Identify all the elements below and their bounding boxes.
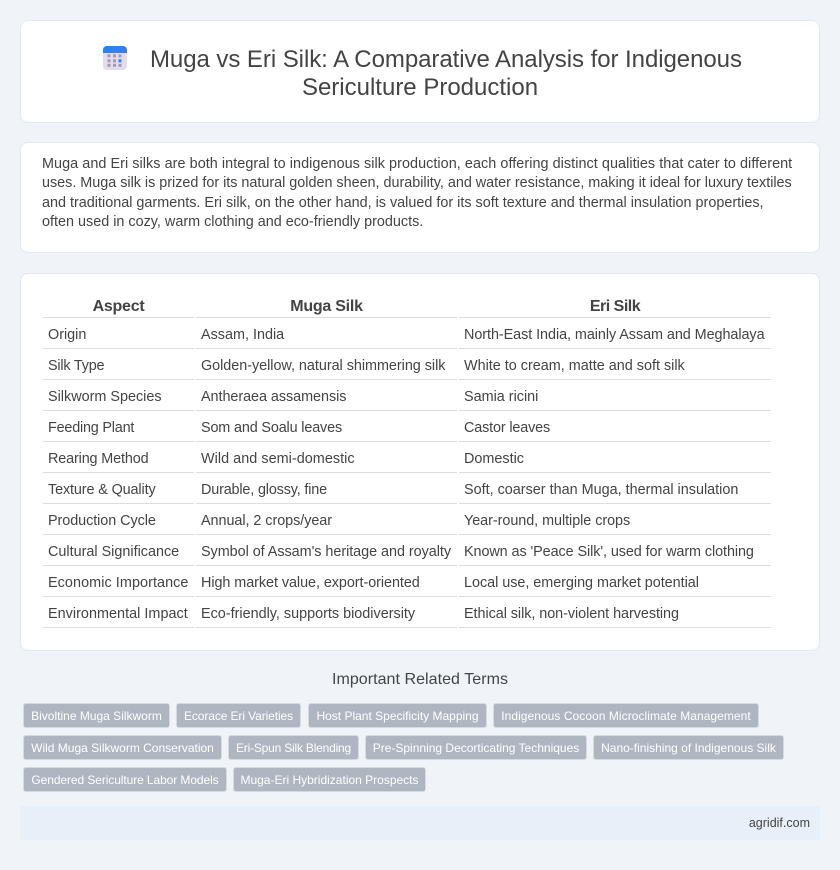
related terms tags: Ecorace Eri Varieties bbox=[184, 709, 293, 723]
related terms tags: Wild Muga Silkworm Conservation bbox=[31, 741, 214, 755]
comparison table: Wild and semi-domestic bbox=[201, 451, 355, 467]
comparison table: Golden-yellow, natural shimmering silk bbox=[201, 358, 445, 374]
comparison table: Annual, 2 crops/year bbox=[201, 513, 332, 529]
footer bar bbox=[20, 806, 820, 840]
comparison table: Eri Silk bbox=[590, 298, 640, 315]
comparison table panel bbox=[20, 273, 820, 651]
comparison table: Year-round, multiple crops bbox=[464, 513, 630, 529]
comparison table: Silk Type bbox=[48, 358, 104, 374]
footer site name: agridif.com bbox=[749, 816, 810, 830]
comparison table: Durable, glossy, fine bbox=[201, 482, 327, 498]
comparison table: Samia ricini bbox=[464, 389, 538, 405]
comparison table: Production Cycle bbox=[48, 513, 156, 529]
comparison table: Silkworm Species bbox=[48, 389, 162, 405]
comparison table bbox=[43, 298, 771, 628]
comparison table: Eco-friendly, supports biodiversity bbox=[201, 606, 415, 622]
intro text: Muga and Eri silks are both integral to indigenous silk production, each offering distinct qualities that cater to different bbox=[42, 156, 792, 172]
related terms tags: Gendered Sericulture Labor Models bbox=[31, 773, 219, 787]
comparison table: Economic Importance bbox=[48, 575, 189, 591]
comparison table: Castor leaves bbox=[464, 420, 550, 436]
comparison table: White to cream, matte and soft silk bbox=[464, 358, 685, 374]
comparison table: Domestic bbox=[464, 451, 524, 467]
related terms tags: Muga-Eri Hybridization Prospects bbox=[240, 773, 419, 787]
comparison table: Rearing Method bbox=[48, 451, 148, 467]
comparison table: Assam, India bbox=[201, 327, 284, 343]
intro text: uses. Muga silk is prized for its natural golden sheen, durability, and water resistance, making it ideal for luxury textiles bbox=[42, 175, 792, 191]
comparison table: Cultural Significance bbox=[48, 544, 179, 560]
related terms heading: Important Related Terms bbox=[332, 671, 508, 688]
title: Sericulture Production bbox=[302, 74, 538, 101]
related terms tags: Eri-Spun Silk Blending bbox=[236, 741, 351, 755]
comparison table: Known as 'Peace Silk', used for warm clothing bbox=[464, 544, 754, 560]
comparison table: Soft, coarser than Muga, thermal insulation bbox=[464, 482, 738, 498]
intro text bbox=[42, 156, 792, 230]
comparison table: Texture & Quality bbox=[48, 482, 156, 498]
title bbox=[150, 46, 742, 101]
related terms tags bbox=[23, 703, 784, 792]
comparison table: Environmental Impact bbox=[48, 606, 188, 622]
related terms tags: Pre-Spinning Decorticating Techniques bbox=[373, 741, 579, 755]
related terms tags: Host Plant Specificity Mapping bbox=[316, 709, 479, 723]
title: Muga vs Eri Silk: A Comparative Analysis for Indigenous bbox=[150, 46, 742, 73]
intro panel bbox=[20, 142, 820, 253]
header card bbox=[20, 20, 820, 123]
comparison table: Muga Silk bbox=[290, 298, 363, 315]
intro text: and traditional garments. Eri silk, on the other hand, is valued for its soft texture and thermal insulation properties, bbox=[42, 195, 764, 211]
comparison table: Ethical silk, non-violent harvesting bbox=[464, 606, 679, 622]
comparison table: Feeding Plant bbox=[48, 420, 134, 436]
related terms tags: Indigenous Cocoon Microclimate Management bbox=[501, 709, 751, 723]
intro text: often used in cozy, warm clothing and eco-friendly products. bbox=[42, 214, 423, 230]
related terms tags: Bivoltine Muga Silkworm bbox=[31, 709, 162, 723]
icon: calendar bbox=[103, 46, 127, 70]
comparison table: Som and Soalu leaves bbox=[201, 420, 342, 436]
comparison table: Origin bbox=[48, 327, 86, 343]
comparison table: Symbol of Assam's heritage and royalty bbox=[201, 544, 451, 560]
related terms tags: Nano-finishing of Indigenous Silk bbox=[601, 741, 776, 755]
comparison table: North-East India, mainly Assam and Meghalaya bbox=[464, 327, 765, 343]
comparison table: Aspect bbox=[93, 298, 144, 315]
comparison table: Antheraea assamensis bbox=[201, 389, 346, 405]
comparison table: High market value, export-oriented bbox=[201, 575, 420, 591]
comparison table: Local use, emerging market potential bbox=[464, 575, 699, 591]
